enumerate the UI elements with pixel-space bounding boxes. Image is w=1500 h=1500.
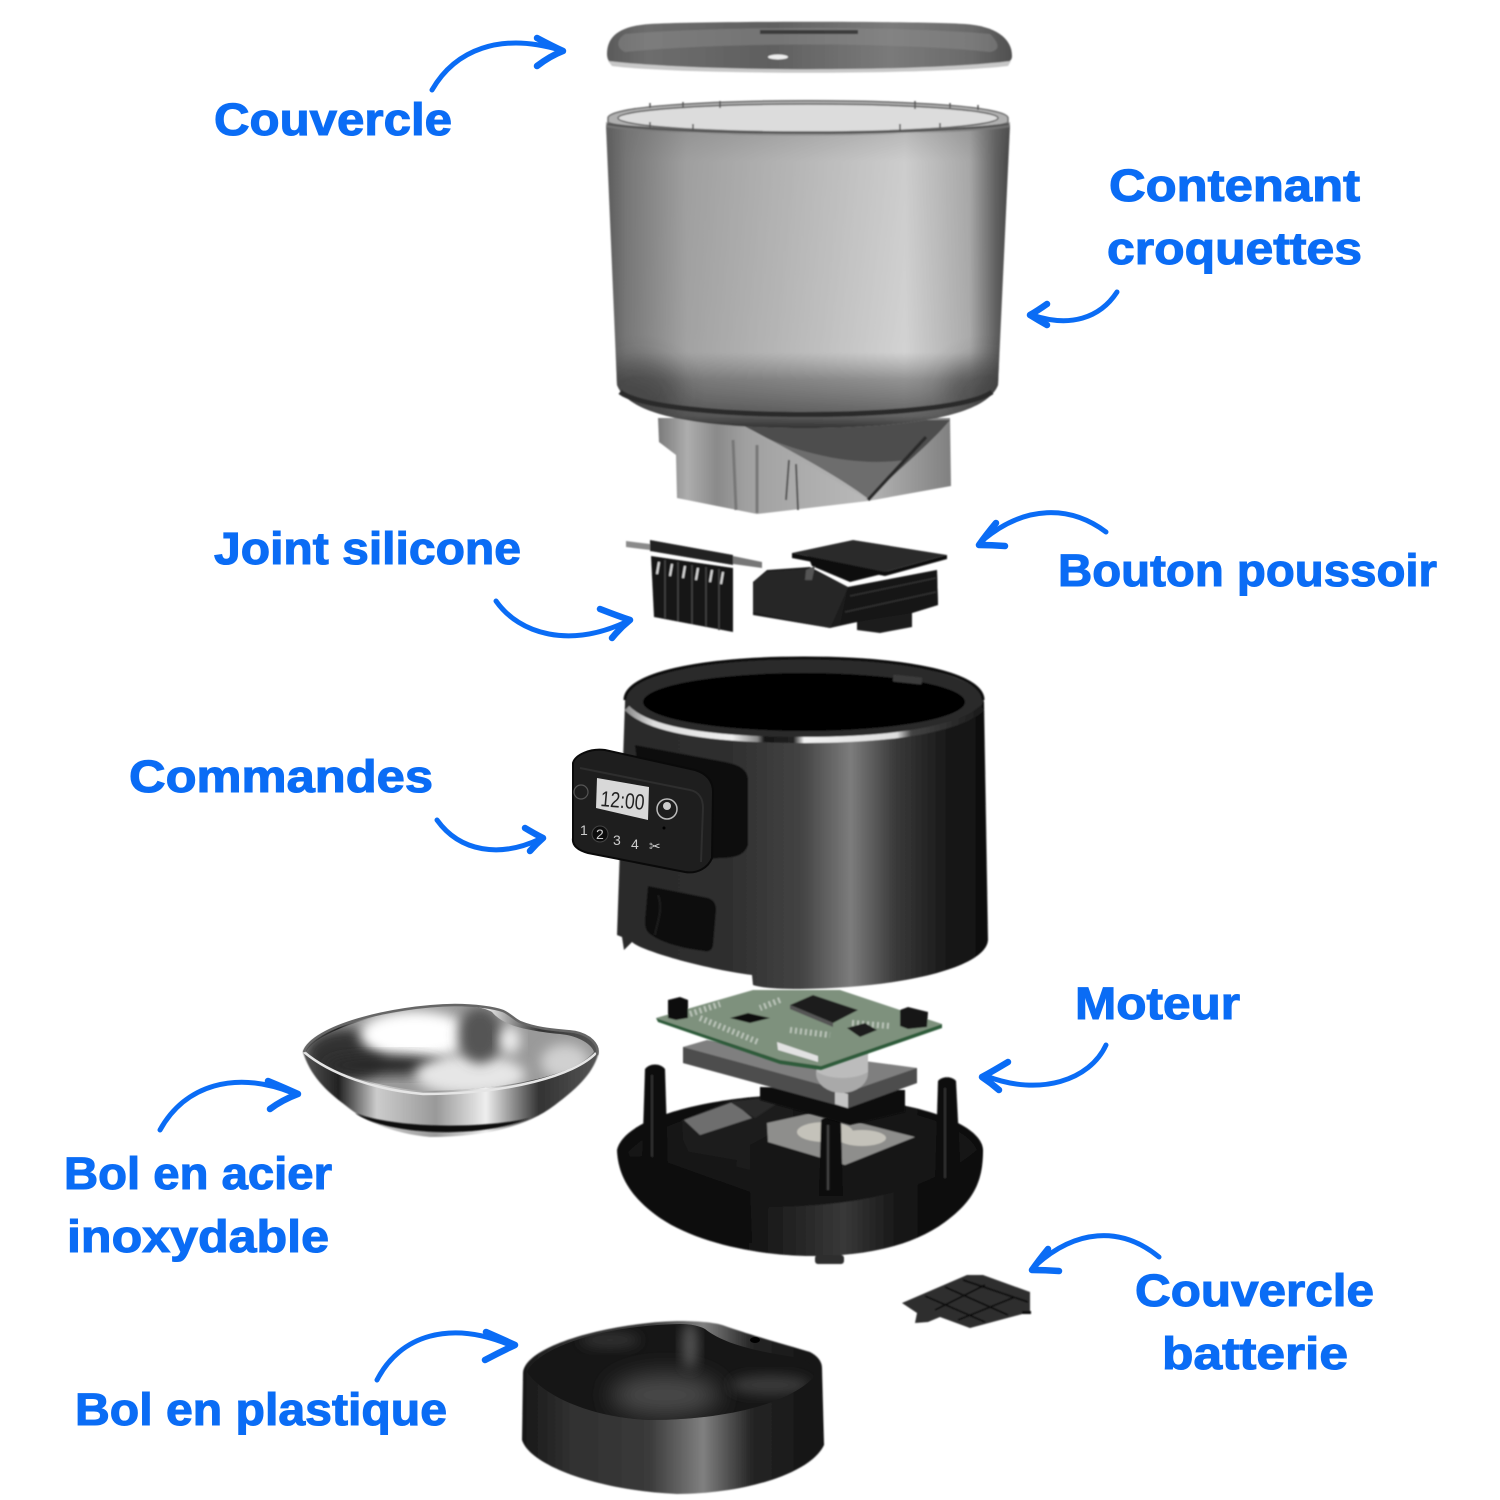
control panel: 12:00 (600, 786, 646, 815)
label: Bol en acier inoxydable (64, 1148, 332, 1262)
illustration: motor base (617, 1064, 983, 1264)
illustration: battery cover (902, 1275, 1031, 1328)
illustration: push button (753, 540, 947, 633)
control panel: ✂ (649, 838, 661, 854)
label: Moteur: Moteur (1075, 978, 1240, 1029)
arrow: Couvercle (432, 38, 563, 90)
illustration: motor plate (683, 1040, 917, 1125)
illustration: silicone joint (626, 540, 762, 632)
label: Couvercle batterie: Couvercle (1135, 1265, 1374, 1316)
illustration: lid (607, 22, 1012, 73)
arrow: Joint silicone (496, 601, 630, 638)
label: Contenant croquettes (1107, 160, 1362, 274)
control panel (573, 750, 713, 872)
label: Commandes: Commandes (129, 751, 433, 802)
label: Couvercle batterie (1135, 1265, 1374, 1379)
arrow: Bouton poussoir (979, 513, 1106, 546)
label: Couvercle batterie: batterie (1162, 1328, 1348, 1379)
illustration: steel bowl (303, 1005, 598, 1137)
arrow: Bol en acier (160, 1081, 298, 1130)
label: Couvercle: Couvercle (214, 94, 452, 145)
control panel: 1 (580, 822, 588, 838)
control panel: 3 (613, 832, 621, 848)
arrow: Commandes (437, 820, 543, 851)
arrow: Bol en plastique (377, 1332, 515, 1380)
arrow: Couvercle batterie (1032, 1236, 1159, 1271)
arrow: Moteur (982, 1045, 1106, 1090)
illustration: circuit board (656, 990, 942, 1070)
label: Contenant croquettes: Contenant (1109, 160, 1360, 211)
control panel: 2 (596, 826, 604, 842)
label: Joint silicone: Joint silicone (214, 523, 521, 574)
illustration: kibble container (600, 101, 1025, 514)
label: Bol en acier inoxydable: Bol en acier (64, 1148, 332, 1199)
label: Bol en acier inoxydable: inoxydable (67, 1211, 329, 1262)
illustration: plastic bowl (522, 1321, 824, 1494)
control panel: 4 (631, 836, 639, 852)
illustration: main body with controls (573, 658, 988, 989)
label: Bol en plastique: Bol en plastique (75, 1384, 447, 1435)
label: Bouton poussoir: Bouton poussoir (1058, 545, 1437, 596)
label: Contenant croquettes: croquettes (1107, 223, 1362, 274)
arrow: Contenant croquettes (1030, 292, 1117, 325)
